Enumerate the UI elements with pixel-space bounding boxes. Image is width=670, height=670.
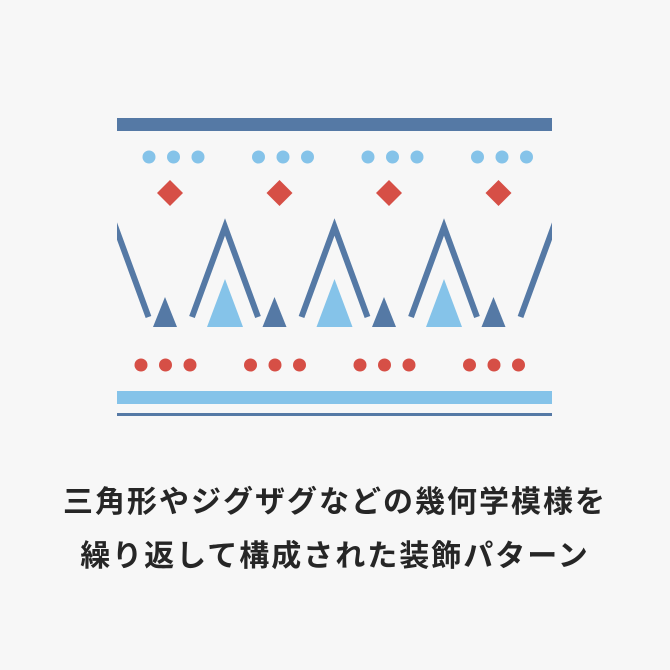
repeating motifs: [117, 150, 552, 372]
pattern illustration: [117, 118, 552, 416]
top bar: [117, 118, 552, 131]
caption line 2: 繰り返して構成された装飾パターン: [80, 540, 590, 573]
caption line 1: 三角形やジグザグなどの幾何学模様を: [63, 486, 607, 519]
bottom light bar: [117, 391, 552, 404]
